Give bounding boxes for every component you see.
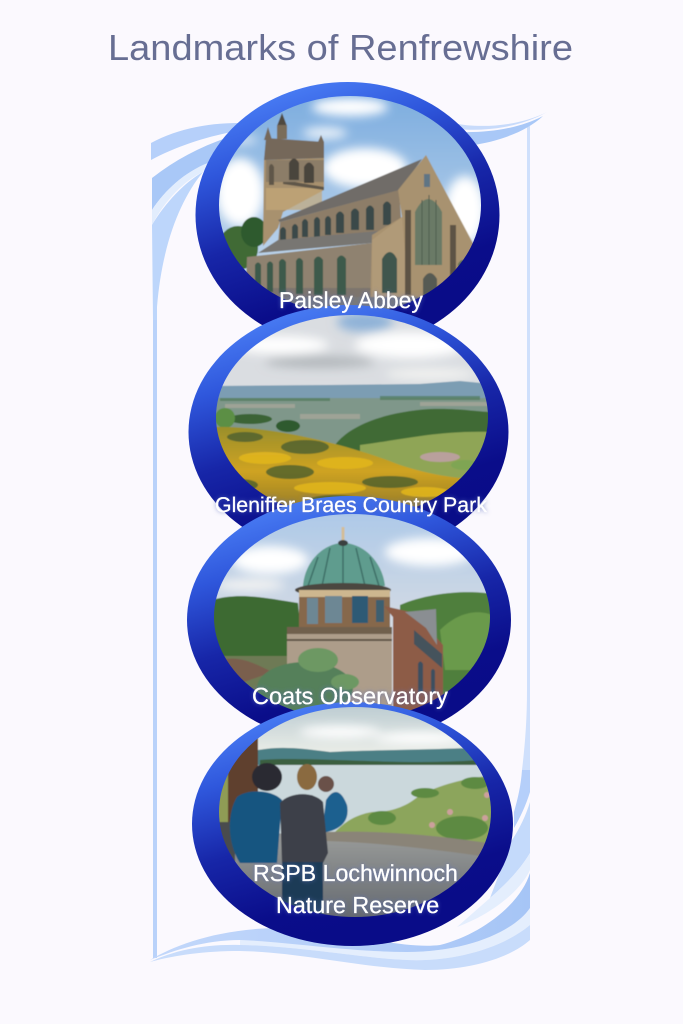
landmark 2: Gleniffer Braes Country Park xyxy=(188,305,508,527)
ribbon frame xyxy=(150,112,547,970)
photo: RSPB Lochwinnoch xyxy=(215,705,495,925)
label: Paisley Abbey: Paisley Abbey xyxy=(279,287,423,313)
photo: Paisley Abbey xyxy=(219,96,481,309)
landmark 4: RSPB Lochwinnoch Nature Reserve xyxy=(192,702,513,946)
ring: Gleniffer Braes xyxy=(188,305,508,559)
photo: Coats Observatory xyxy=(214,514,490,710)
photo: Gleniffer Braes xyxy=(216,315,488,507)
label: Coats Observatory: Coats Observatory xyxy=(252,683,448,709)
ring: RSPB Lochwinnoch xyxy=(192,702,513,946)
label: RSPB Lochwinnoch Nature Reserve xyxy=(253,860,458,918)
label: Gleniffer Braes Country Park: Gleniffer Braes Country Park xyxy=(215,493,487,517)
landmark 3: Coats Observatory xyxy=(187,496,511,744)
title: Landmarks of Renfrewshire xyxy=(108,27,573,68)
label: RSPB Lochwinnoch Nature Reserve: Nature Reserve xyxy=(276,892,439,918)
ring: Paisley Abbey xyxy=(196,82,500,348)
landmark 1: Paisley Abbey xyxy=(196,82,500,348)
ring: Coats Observatory xyxy=(187,496,511,744)
label: RSPB Lochwinnoch Nature Reserve: RSPB Lochwinnoch xyxy=(253,860,458,886)
